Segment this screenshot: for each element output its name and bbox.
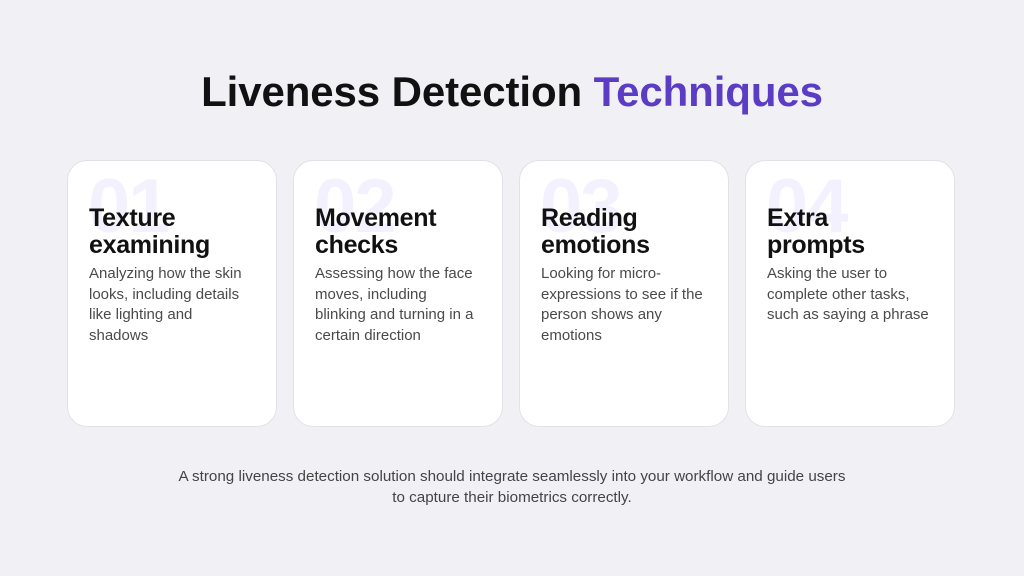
panel: reading emotions (519, 160, 729, 427)
heading: reading emotions: Reading (541, 204, 638, 232)
heading: texture examining (89, 204, 210, 259)
text: texture description: shadows (89, 326, 148, 344)
heading: reading emotions (541, 204, 650, 259)
text: prompts description: Asking the user to (767, 265, 887, 282)
heading: extra prompts: Extra (767, 204, 828, 232)
text: emotions description: emotions (541, 326, 602, 344)
text: texture description: like lighting and (89, 306, 192, 323)
text: movement description: certain direction (315, 326, 421, 344)
text: texture description: Analyzing how the skin (89, 265, 242, 282)
text: movement description: Assessing how the face (315, 265, 473, 282)
number 02: 02 (314, 164, 395, 249)
panel: extra prompts (745, 160, 955, 427)
panel: movement checks (293, 160, 503, 427)
text: emotions description (541, 265, 703, 344)
text: emotions description: Looking for micro- (541, 265, 661, 282)
text: prompts description: such as saying a phrase (767, 306, 929, 323)
heading: reading emotions: emotions (541, 231, 650, 259)
heading: movement checks: Movement (315, 204, 436, 232)
heading: texture examining: examining (89, 231, 210, 259)
footer note: A strong liveness detection solution should integrate seamlessly into your workflow and guide users (179, 468, 845, 485)
heading: texture examining: Texture (89, 204, 175, 232)
number 04: 04 (766, 164, 847, 249)
text: movement description: blinking and turning in a (315, 306, 473, 323)
number 03: 03 (540, 164, 621, 249)
footer note (178, 468, 845, 506)
text: emotions description: expressions to see if the (541, 286, 703, 302)
text: movement description: moves, including (315, 286, 427, 302)
number 01: 01 (88, 164, 169, 249)
text: movement description (315, 265, 474, 344)
text: emotions description: person shows any (541, 306, 662, 323)
text: prompts description: complete other tasks, (767, 286, 910, 302)
heading: movement checks: checks (315, 231, 398, 259)
text: texture description (89, 265, 242, 344)
heading: extra prompts: prompts (767, 231, 865, 259)
text: prompts description (767, 265, 929, 323)
heading: movement checks (315, 204, 436, 259)
title: Liveness Detection Techniques (201, 68, 823, 115)
panel: texture examining (67, 160, 277, 427)
footer note: to capture their biometrics correctly. (392, 488, 632, 506)
heading: extra prompts (767, 204, 865, 259)
text: texture description: looks, including details (89, 286, 239, 302)
